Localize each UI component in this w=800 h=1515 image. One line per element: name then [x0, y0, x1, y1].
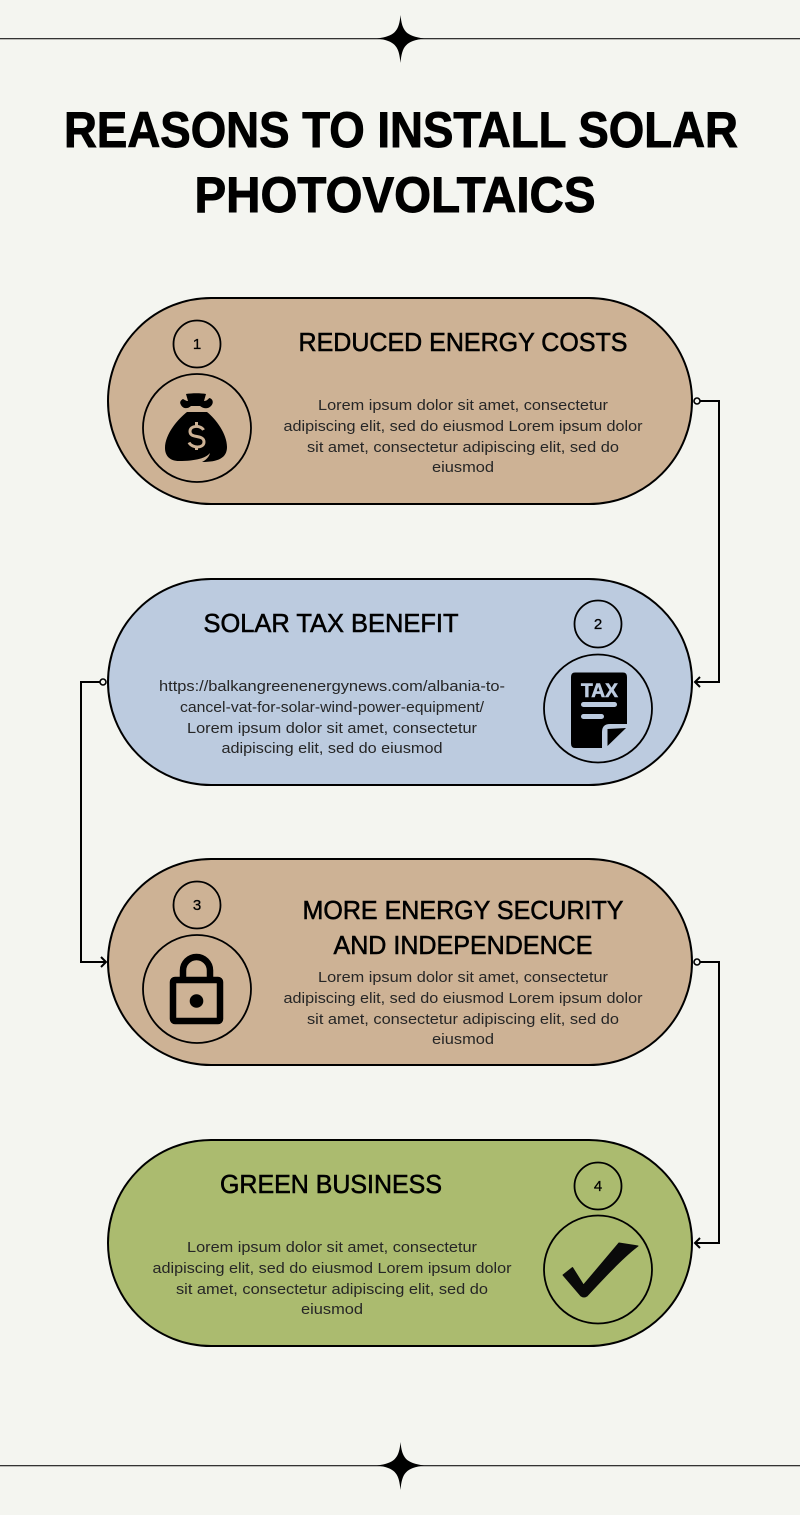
panel: more energy security and independence — [108, 859, 692, 1065]
text block — [159, 678, 505, 757]
top divider with star — [0, 15, 800, 63]
number badge 1 — [174, 320, 220, 368]
bottom divider with star — [0, 1442, 800, 1490]
number badge 3 — [174, 882, 220, 928]
text block: sit amet, consectetur adipiscing elit, sed do — [176, 1281, 488, 1298]
title — [64, 102, 738, 223]
text block — [152, 1239, 511, 1318]
panel: green business — [108, 1140, 692, 1346]
number badge 4 — [574, 1162, 622, 1210]
text block: Lorem ipsum dolor sit amet, consectetur — [187, 1239, 477, 1256]
connector: step 2 to step 3 — [81, 679, 106, 967]
panel: reduced energy costs — [108, 298, 692, 504]
title: REASONS TO INSTALL SOLAR — [64, 102, 738, 158]
icon: padlock — [143, 935, 251, 1043]
heading: AND INDEPENDENCE — [334, 932, 592, 960]
text block: eiusmod — [301, 1301, 363, 1318]
number badge 1: 1 — [193, 336, 201, 353]
number badge 2 — [574, 600, 622, 648]
text block — [284, 969, 642, 1048]
text block: adipiscing elit, sed do eiusmod — [222, 740, 442, 757]
text block: Lorem ipsum dolor sit amet, consectetur — [318, 969, 608, 986]
icon: check mark — [544, 1216, 652, 1324]
panel: solar tax benefit — [108, 579, 692, 785]
text block — [284, 397, 642, 476]
text block: eiusmod — [432, 459, 494, 476]
text block: adipiscing elit, sed do eiusmod Lorem ipsum dolor — [152, 1260, 511, 1277]
heading: REDUCED ENERGY COSTS — [298, 329, 628, 357]
connector: step 1 to step 2 — [694, 398, 719, 687]
text block: cancel-vat-for-solar-wind-power-equipment/ — [180, 699, 485, 716]
heading: MORE ENERGY SECURITY — [302, 897, 624, 925]
title: PHOTOVOLTAICS — [194, 167, 596, 223]
number badge 4: 4 — [594, 1178, 602, 1195]
number badge 2: 2 — [594, 616, 602, 633]
heading — [302, 897, 624, 960]
text block: adipiscing elit, sed do eiusmod Lorem ipsum dolor — [284, 418, 642, 435]
text block: eiusmod — [432, 1031, 494, 1048]
connector: step 3 to step 4 — [694, 959, 719, 1248]
icon: tax document — [544, 654, 652, 762]
heading: GREEN BUSINESS — [220, 1171, 442, 1199]
icon: money bag — [143, 374, 251, 482]
text block: adipiscing elit, sed do eiusmod Lorem ipsum dolor — [284, 990, 642, 1007]
heading: SOLAR TAX BENEFIT — [204, 610, 458, 638]
icon: tax document: TAX — [581, 681, 618, 702]
text block: Lorem ipsum dolor sit amet, consectetur — [187, 720, 477, 737]
text block: sit amet, consectetur adipiscing elit, sed do — [307, 439, 619, 456]
number badge 3: 3 — [193, 897, 201, 914]
text block: Lorem ipsum dolor sit amet, consectetur — [318, 397, 608, 414]
text block: https://balkangreenenergynews.com/albania-to- — [159, 678, 505, 695]
text block: sit amet, consectetur adipiscing elit, sed do — [307, 1011, 619, 1028]
